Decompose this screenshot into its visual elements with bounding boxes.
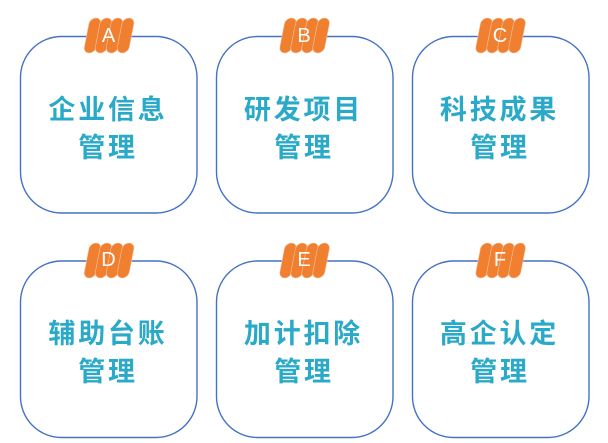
panel: 企业信息管理: 企业信息 — [48, 95, 168, 125]
panel: 辅助台账管理: 辅助台账 — [48, 318, 168, 349]
panel: 科技成果管理: C — [493, 25, 507, 47]
panel: 研发项目管理: B — [297, 25, 311, 47]
panel: 研发项目管理 — [216, 18, 393, 213]
panel: 研发项目管理: 管理 — [274, 133, 334, 163]
panel: 加计扣除管理: 加计扣除 — [244, 318, 363, 349]
panel: 加计扣除管理 — [216, 243, 393, 438]
panel: 加计扣除管理: E — [297, 249, 311, 271]
panel: 高企认定管理: 高企认定 — [440, 319, 559, 349]
panel: 高企认定管理: 管理 — [470, 357, 530, 387]
panel: 加计扣除管理: 管理 — [274, 357, 334, 387]
panel: 企业信息管理: A — [102, 25, 116, 47]
panel: 企业信息管理 — [20, 18, 197, 213]
panel: 辅助台账管理 — [20, 243, 197, 438]
panel: 高企认定管理 — [412, 243, 589, 438]
panel: 研发项目管理: 研发项目 — [244, 95, 363, 125]
panel: 企业信息管理: 管理 — [78, 133, 138, 163]
panel: 高企认定管理: F — [494, 249, 506, 271]
panel: 科技成果管理: 管理 — [470, 133, 530, 163]
panel: 辅助台账管理: 管理 — [78, 357, 138, 387]
panel: 科技成果管理 — [412, 18, 589, 213]
panel: 辅助台账管理: D — [101, 249, 116, 271]
panel: 科技成果管理: 科技成果 — [440, 95, 559, 125]
